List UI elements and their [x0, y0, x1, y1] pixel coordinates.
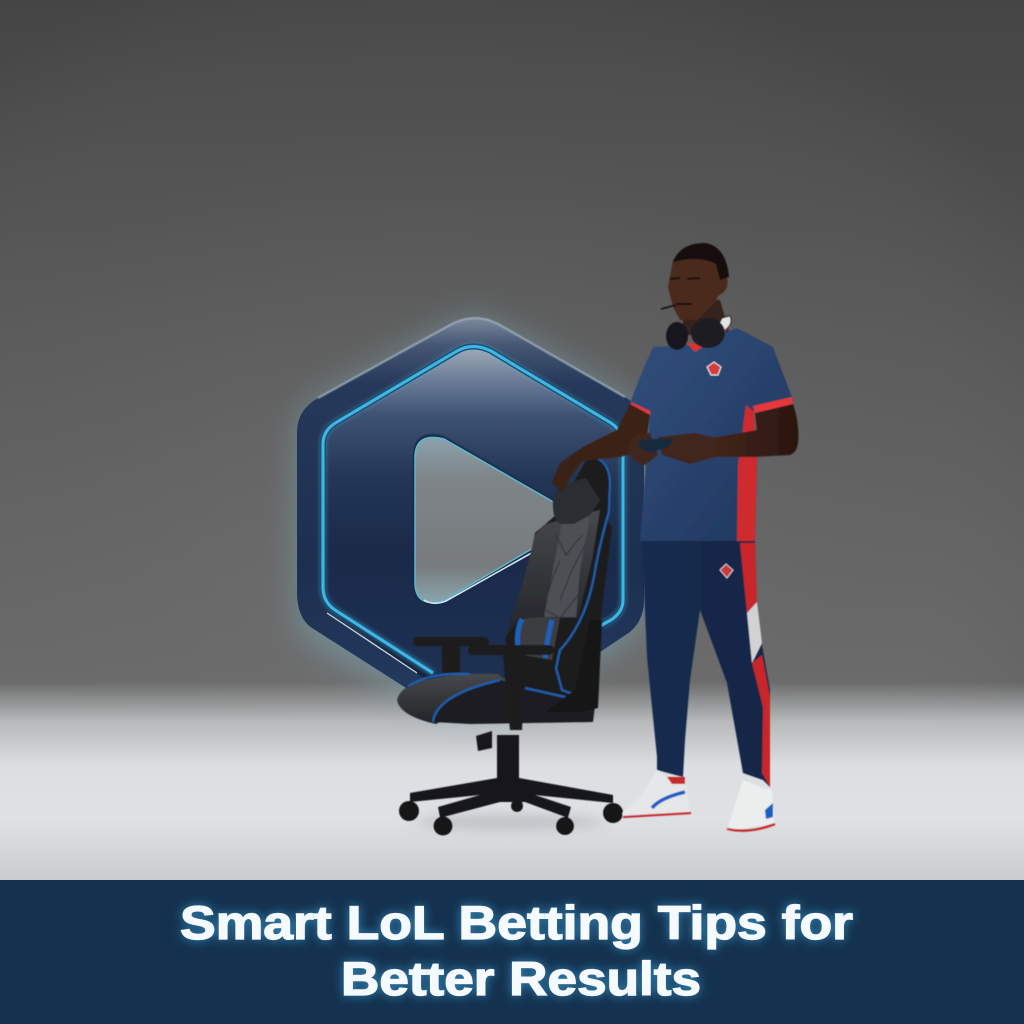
hands [628, 433, 717, 465]
trouser logo [720, 564, 733, 578]
trouser red stripe bottom [752, 655, 770, 787]
sleeve cuff left [631, 402, 650, 417]
emblem glow [297, 318, 644, 715]
right arm [690, 404, 798, 460]
trousers [642, 540, 770, 787]
left arm and hand [552, 404, 650, 493]
studio floor [0, 682, 1024, 880]
play triangle bottom highlight [424, 551, 535, 603]
left shoe [622, 770, 691, 818]
headrest [553, 478, 600, 524]
lumbar pillow [515, 617, 560, 660]
play triangle window [415, 437, 583, 603]
quilted centre panel [544, 517, 590, 617]
emblem lower white edge line [327, 613, 417, 673]
near armrest [468, 645, 554, 730]
jersey side panel [737, 405, 757, 541]
face features [670, 278, 700, 304]
quilted back pattern [546, 535, 585, 618]
play triangle recess [413, 434, 587, 606]
lumbar pillow blue trim [518, 619, 552, 658]
headset microphone [661, 305, 676, 309]
hexagon play emblem [297, 318, 644, 715]
five star base [410, 778, 613, 818]
chair back shell [505, 458, 612, 705]
headphones [666, 316, 731, 350]
chair seat [397, 674, 520, 724]
gas lift and knob [476, 731, 519, 781]
chair floor shadow [415, 815, 605, 829]
head [668, 252, 728, 320]
seat front base [433, 680, 597, 724]
title line one: Smart LoL Betting Tips for [180, 896, 853, 949]
far armrest [413, 637, 489, 675]
emblem top edge highlight [318, 318, 625, 398]
seat blue piping [408, 674, 565, 722]
trouser white stripe [747, 602, 762, 663]
sleeve cuff right [753, 397, 793, 413]
gaming chair [397, 458, 623, 836]
title banner [0, 880, 1024, 1024]
jersey logo [707, 362, 721, 375]
right shoe [727, 780, 775, 831]
neon ring glow [323, 346, 623, 673]
game controller [638, 439, 674, 453]
title line two: Better Results [341, 952, 701, 1005]
emblem inner panel [323, 346, 623, 690]
neck [682, 300, 730, 335]
hair [673, 243, 729, 280]
collar [686, 326, 730, 352]
emblem outer body [297, 318, 644, 700]
casters [399, 800, 623, 836]
jersey [630, 328, 793, 541]
chair back cushion [505, 510, 600, 638]
chair side mechanism [545, 620, 602, 712]
neon ring [323, 346, 623, 673]
trouser red stripe top [740, 543, 757, 613]
man with controller [552, 243, 798, 831]
chair blue piping [556, 458, 610, 696]
